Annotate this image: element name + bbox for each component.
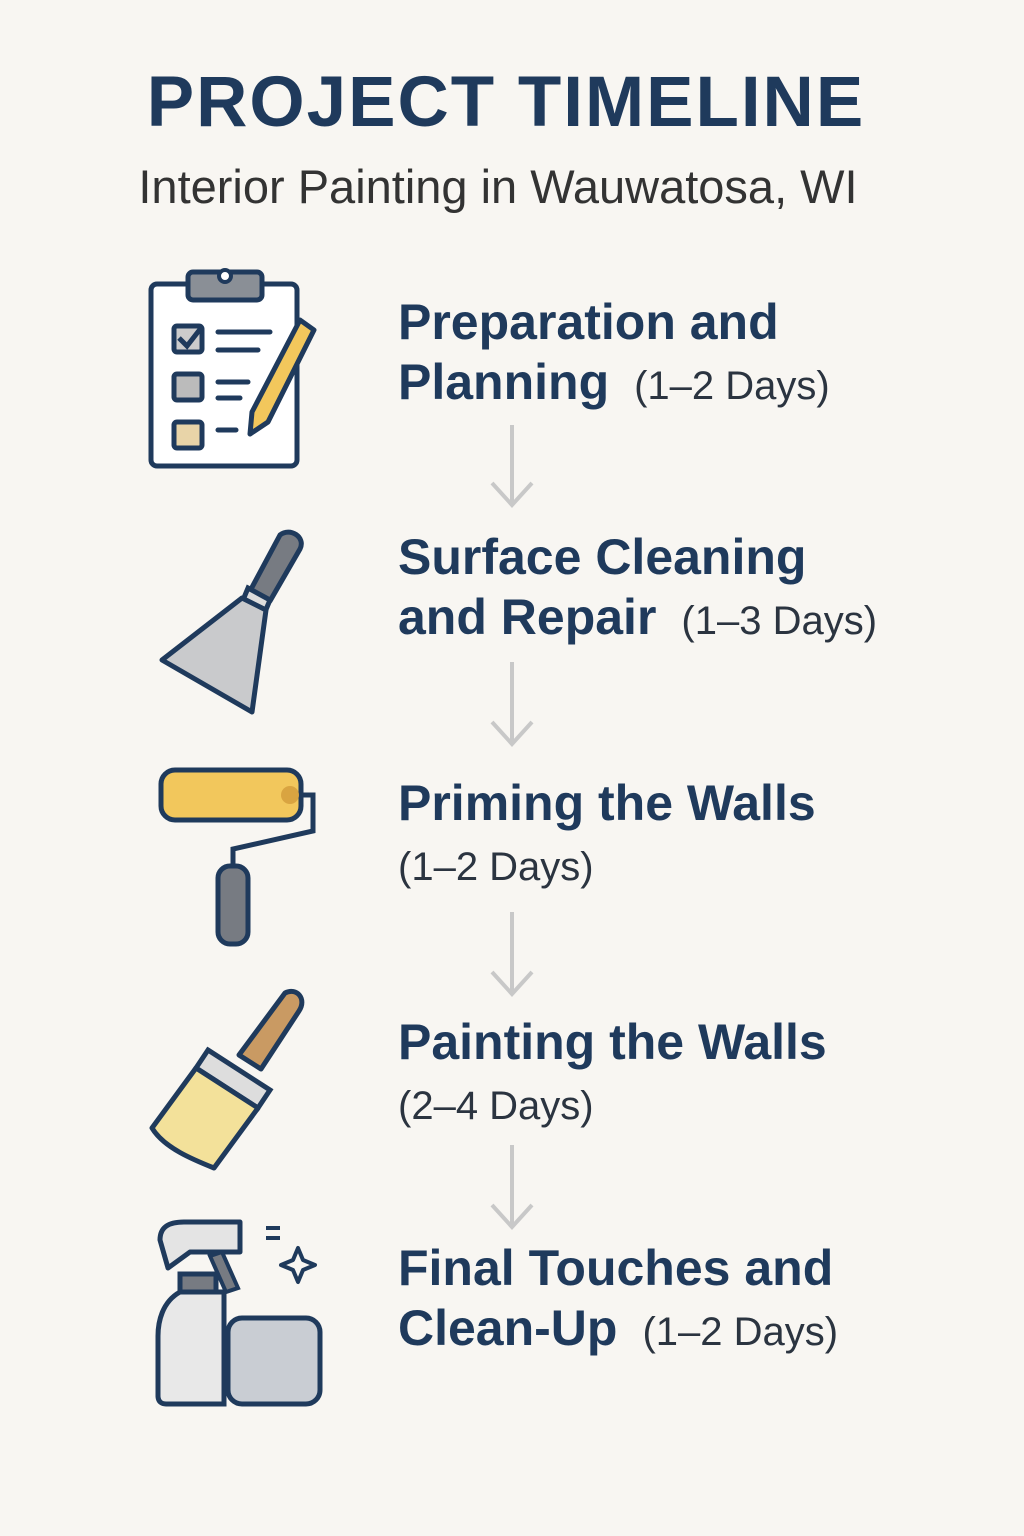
step 5 text: Final Touches and	[398, 1240, 833, 1296]
step 1 text: Preparation and	[398, 294, 779, 350]
step 1 text: Planning (1–2 Days)	[398, 354, 830, 410]
icon: clipboard	[148, 268, 317, 468]
icon: paint brush	[150, 988, 304, 1170]
icon: scraper	[160, 530, 304, 714]
icon: paint roller	[158, 768, 316, 946]
step 3 text: Priming the Walls	[398, 775, 816, 831]
step 4 text	[398, 1014, 827, 1128]
step 5 text: Clean-Up (1–2 Days)	[398, 1300, 838, 1356]
step 2 text: and Repair (1–3 Days)	[398, 589, 877, 645]
step 4 text: Painting the Walls	[398, 1014, 827, 1070]
title: PROJECT TIMELINE	[147, 63, 865, 142]
arrow 2	[490, 662, 534, 747]
step 3 text: (1–2 Days)	[398, 845, 594, 889]
arrow 1	[490, 425, 534, 508]
step 5 text	[398, 1240, 838, 1356]
step 3 text	[398, 775, 816, 889]
step 4 text: (2–4 Days)	[398, 1084, 594, 1128]
arrow 4	[490, 1145, 534, 1230]
icon: spray bottle and cloth	[156, 1220, 322, 1406]
step 1 text	[398, 294, 830, 410]
arrow 3	[490, 912, 534, 997]
step 2 text	[398, 529, 877, 645]
subtitle: Interior Painting in Wauwatosa, WI	[138, 160, 858, 213]
step 2 text: Surface Cleaning	[398, 529, 806, 585]
